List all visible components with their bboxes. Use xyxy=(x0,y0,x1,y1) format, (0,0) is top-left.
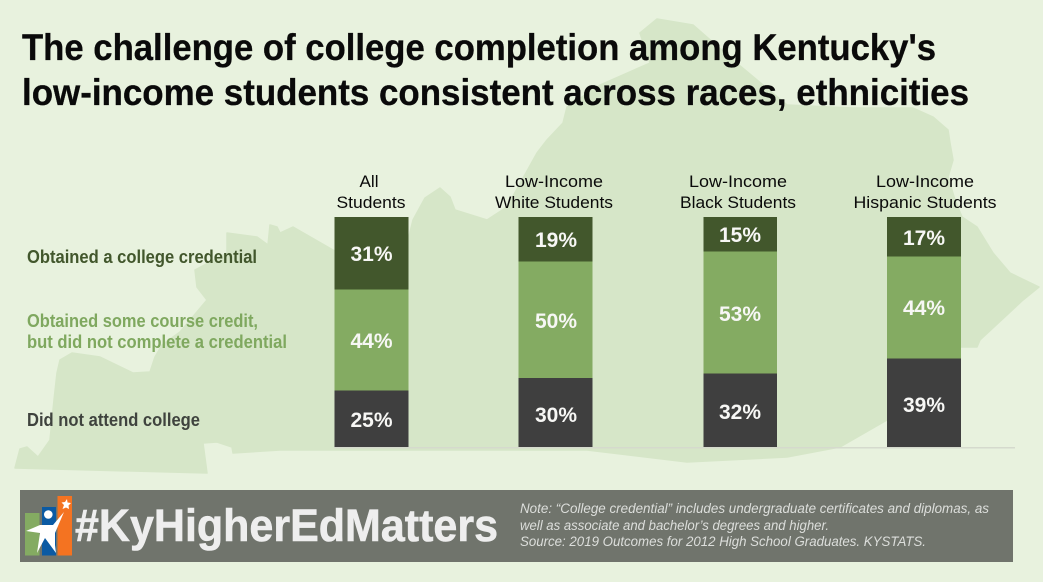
label: obtained some course credit: Obtained some course credit, xyxy=(27,311,258,331)
chart baseline xyxy=(334,447,1015,448)
column: low-income black students: 15% xyxy=(719,224,761,247)
note and source xyxy=(520,501,989,549)
title: low-income students consistent across races, ethnicities xyxy=(22,72,969,113)
column: low-income hispanic students: 39% xyxy=(903,394,945,417)
column: all students: All xyxy=(360,172,378,191)
column: low-income white students: 19% xyxy=(535,229,577,252)
background map: Kentucky xyxy=(15,19,1039,473)
column: all students: 25% xyxy=(350,409,393,432)
title: The challenge of college completion among Kentucky's xyxy=(22,27,936,68)
footer banner xyxy=(20,490,1013,562)
icon: logo with bars and star figure xyxy=(25,496,72,556)
label: obtained some course credit: but did not complete a credential xyxy=(27,332,287,352)
column: low-income hispanic students: Low-Income xyxy=(876,172,974,191)
column: all students xyxy=(334,172,408,447)
column: all students: 31% xyxy=(350,243,393,266)
column: low-income hispanic students: 17% xyxy=(903,227,945,250)
column: low-income black students: 53% xyxy=(719,303,761,326)
column: low-income hispanic students xyxy=(854,172,996,447)
column: low-income white students: 30% xyxy=(535,404,577,427)
column: low-income white students xyxy=(495,172,613,447)
note and source: Note: “College credential” includes undergraduate certificates and diplomas, as xyxy=(520,501,989,516)
legend labels xyxy=(27,247,287,430)
column: low-income hispanic students: Hispanic Students xyxy=(854,193,996,212)
label: obtained a college credential: Obtained a college credential xyxy=(27,247,257,267)
column: low-income black students xyxy=(680,172,796,447)
title xyxy=(22,27,969,113)
column: low-income black students: Low-Income xyxy=(689,172,787,191)
column: low-income white students: 50% xyxy=(535,310,577,333)
column: low-income black students: Black Students xyxy=(680,193,796,212)
column: all students: 44% xyxy=(350,330,393,353)
hashtag: #KyHigherEdMatters xyxy=(75,500,498,551)
column: low-income white students: White Students xyxy=(495,193,613,212)
column: low-income black students: 32% xyxy=(719,401,761,424)
stacked bar chart xyxy=(334,172,996,447)
label: did not attend college: Did not attend college xyxy=(27,410,200,430)
note and source: well as associate and bachelor’s degrees and higher. xyxy=(520,518,829,533)
column: all students: Students xyxy=(336,193,406,212)
label: obtained some course credit xyxy=(27,311,287,352)
column: low-income white students: Low-Income xyxy=(505,172,603,191)
column: low-income hispanic students: 44% xyxy=(903,297,945,320)
note and source: Source: 2019 Outcomes for 2012 High School Graduates. KYSTATS. xyxy=(520,534,926,549)
